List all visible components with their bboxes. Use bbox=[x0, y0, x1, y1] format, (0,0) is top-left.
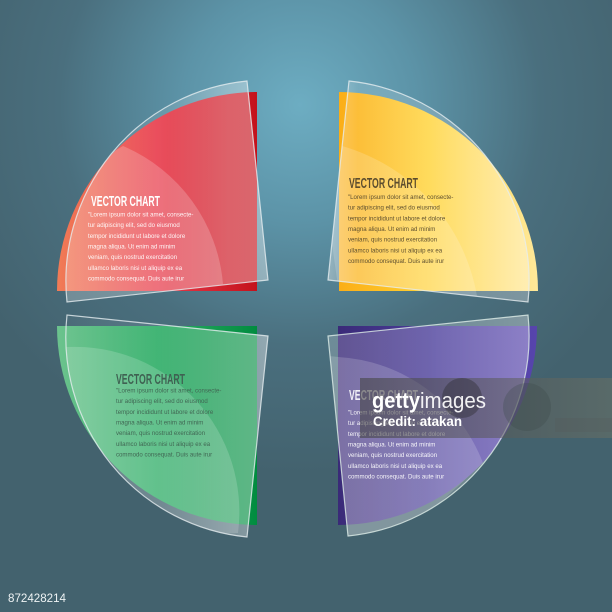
red body text: magna aliqua. Ut enim ad minim bbox=[88, 244, 175, 250]
purple body text: commodo consequat. Duis aute irur bbox=[348, 474, 444, 480]
red heading: VECTOR CHART bbox=[91, 194, 160, 210]
purple heading: VECTOR CHART bbox=[349, 388, 418, 404]
watermark logo bbox=[372, 388, 486, 413]
watermark band bbox=[360, 378, 612, 438]
red body text: commodo consequat. Duis aute irur bbox=[88, 276, 184, 282]
red body text: tur adipiscing elit, sed do eiusmod bbox=[88, 222, 180, 229]
panel: red quarter bbox=[57, 80, 269, 303]
watermark logo: getty bbox=[372, 388, 421, 413]
purple body text: tur adipiscing elit, sed do eiusmod bbox=[348, 420, 440, 427]
red body text: tempor incididunt ut labore et dolore bbox=[88, 233, 186, 240]
green body text: veniam, quis nostrud exercitation bbox=[116, 430, 205, 437]
yellow body text: magna aliqua. Ut enim ad minim bbox=[348, 226, 435, 233]
purple glass pane bbox=[328, 315, 529, 536]
yellow colour sector bbox=[339, 92, 538, 291]
yellow heading: VECTOR CHART bbox=[349, 176, 418, 192]
green body text: "Lorem ipsum dolor sit amet, consecte- bbox=[116, 388, 221, 394]
red body text: ullamco laboris nisi ut aliquip ex ea bbox=[88, 265, 183, 272]
green glass pane bbox=[66, 315, 268, 537]
purple body text: ullamco laboris nisi ut aliquip ex ea bbox=[348, 463, 443, 470]
purple colour sector bbox=[338, 326, 537, 525]
yellow glass pane bbox=[328, 81, 529, 302]
purple body text: "Lorem ipsum dolor sit amet, consecte- bbox=[348, 410, 453, 416]
green body text: magna aliqua. Ut enim ad minim bbox=[116, 420, 203, 426]
green body text: tempor incididunt ut labore et dolore bbox=[116, 409, 214, 416]
red glass pane bbox=[66, 81, 268, 302]
green body text: tur adipiscing elit, sed do eiusmod bbox=[116, 398, 208, 405]
purple glass highlight bbox=[320, 355, 483, 540]
yellow body text: tempor incididunt ut labore et dolore bbox=[348, 215, 446, 222]
red body text: veniam, quis nostrud exercitation bbox=[88, 254, 177, 261]
purple body text: veniam, quis nostrud exercitation bbox=[348, 452, 437, 459]
watermark credit: Credit: atakan bbox=[373, 414, 462, 429]
red body text: "Lorem ipsum dolor sit amet, consecte- bbox=[88, 212, 193, 218]
green glass highlight bbox=[66, 347, 240, 534]
red colour sector bbox=[57, 92, 257, 291]
yellow body text: tur adipiscing elit, sed do eiusmod bbox=[348, 205, 440, 212]
purple body text: tempor incididunt ut labore et dolore bbox=[348, 431, 446, 438]
yellow body text: ullamco laboris nisi ut aliquip ex ea bbox=[348, 247, 443, 254]
panel: green quarter bbox=[40, 315, 268, 540]
green heading: VECTOR CHART bbox=[116, 372, 185, 388]
purple body text: magna aliqua. Ut enim ad minim bbox=[348, 442, 435, 448]
yellow body text: "Lorem ipsum dolor sit amet, consecte- bbox=[348, 194, 453, 201]
panel: purple quarter bbox=[320, 315, 537, 540]
green body text: commodo consequat. Duis aute irur bbox=[116, 452, 212, 458]
green colour sector bbox=[57, 326, 257, 525]
yellow body text: commodo consequat. Duis aute irur bbox=[348, 258, 444, 265]
yellow glass highlight bbox=[332, 146, 477, 296]
image id: 872428214 bbox=[8, 593, 67, 605]
red glass highlight bbox=[66, 146, 223, 302]
panel: yellow quarter bbox=[320, 81, 538, 302]
green body text: ullamco laboris nisi ut aliquip ex ea bbox=[116, 441, 211, 448]
yellow body text: veniam, quis nostrud exercitation bbox=[348, 237, 437, 244]
watermark logo: images bbox=[420, 388, 486, 413]
